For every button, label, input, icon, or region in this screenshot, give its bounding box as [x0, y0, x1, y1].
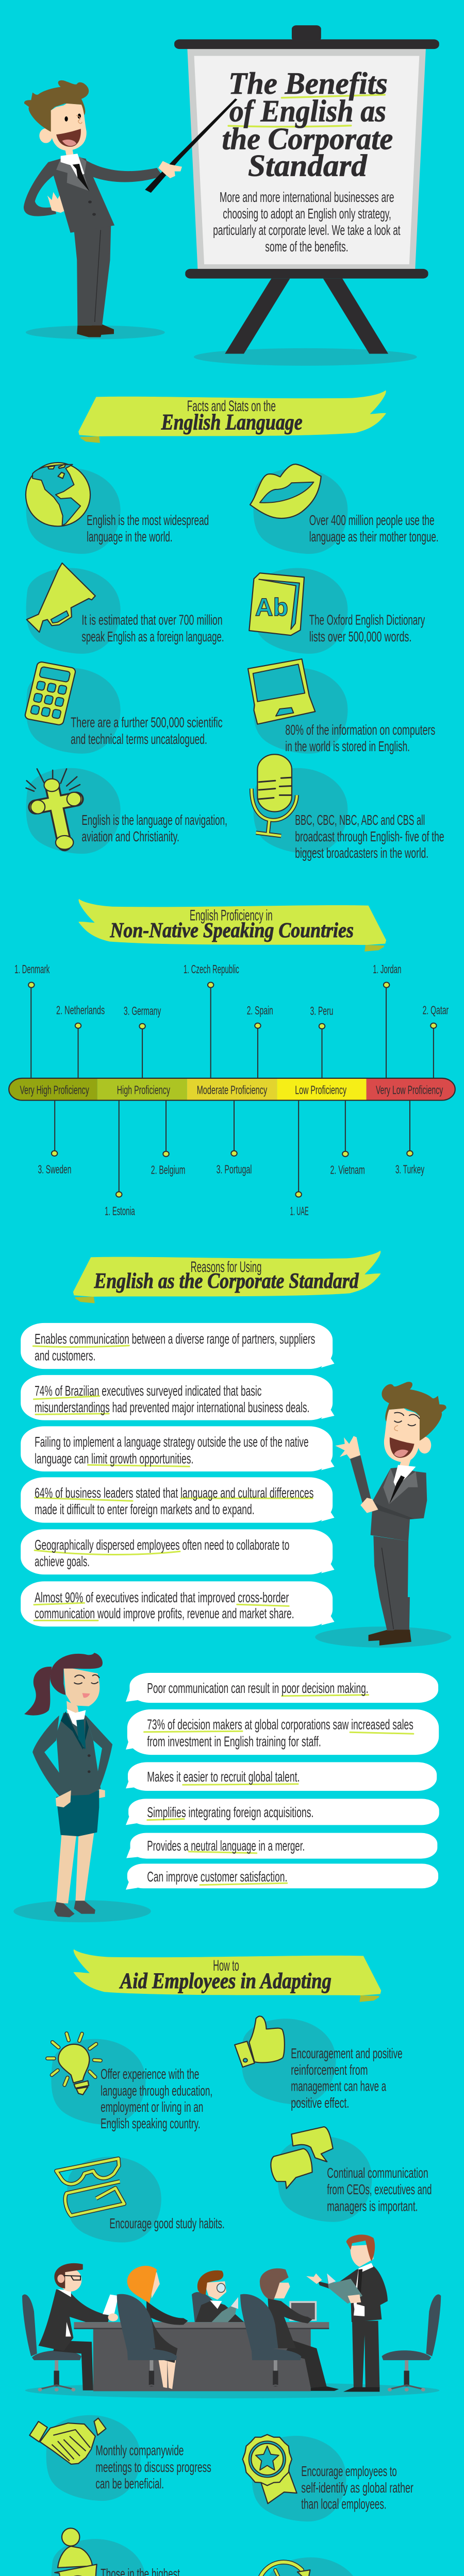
speech bubble 9: Makes it easier to recruit global talent. — [147, 1769, 300, 1785]
tip text 6 — [301, 2463, 413, 2512]
icon backdrops — [26, 468, 347, 854]
speech bubble 1: and customers. — [35, 1348, 95, 1364]
intro text: some of the benefits. — [265, 239, 349, 255]
icon: thumbs up — [235, 2016, 285, 2067]
speech bubble 2 — [21, 1375, 335, 1420]
speech bubble 11: Provides a neutral language in a merger. — [147, 1838, 305, 1854]
banner: aid employees — [73, 1950, 381, 2002]
banner: facts and stats — [78, 391, 386, 443]
tip text 3: Encourage good study habits. — [109, 2216, 225, 2232]
seated man right — [240, 2268, 339, 2391]
country labels: 1. Denmark — [14, 962, 50, 976]
speech bubble 12 — [126, 1863, 438, 1890]
meeting scene — [22, 2234, 441, 2398]
seated man left — [39, 2263, 119, 2391]
title — [222, 66, 393, 183]
fact text 8 — [295, 812, 444, 861]
fact text 3: It is estimated that over 700 million — [81, 612, 223, 628]
banner: facts and stats: Facts and Stats on the — [187, 397, 276, 415]
icon: lips — [250, 464, 321, 518]
country labels: 2. Vietnam — [330, 1163, 365, 1177]
country labels: 3. Germany — [124, 1004, 161, 1018]
right empty chair — [382, 2294, 441, 2392]
title highlights — [228, 95, 385, 127]
speech bubble 3 — [21, 1426, 335, 1471]
icon: glasses and book — [56, 2159, 124, 2216]
icon: speech bubbles — [271, 2127, 333, 2189]
tip text 5 — [95, 2442, 211, 2492]
icon: megaphone — [27, 563, 95, 632]
banner: proficiency: English Proficiency in — [190, 906, 273, 924]
proficiency bar: Moderate Proficiency — [197, 1083, 268, 1097]
fact text 3: speak English as a foreign language. — [81, 629, 224, 645]
fact text 1: language in the world. — [87, 529, 173, 545]
icon: laptop — [248, 659, 315, 724]
banner: proficiency: Non-Native Speaking Countries — [110, 919, 354, 942]
speech bubble 10: Simplifies integrating foreign acquisitions. — [147, 1805, 313, 1821]
country labels: 3. Peru — [310, 1004, 333, 1018]
title: The Benefits — [228, 66, 388, 101]
tip text 5: meetings to discuss progress — [95, 2459, 211, 2476]
proficiency timeline chart — [9, 962, 455, 1218]
banner: reasons: Reasons for Using — [191, 1258, 261, 1275]
intro text — [213, 189, 401, 255]
easel shadow — [194, 348, 417, 366]
tip text 1: employment or living in an — [101, 2099, 203, 2115]
tip text 1 — [101, 2066, 212, 2132]
banner: aid employees: How to — [213, 1957, 239, 1974]
section: aid employees tips continued — [29, 2415, 420, 2576]
speech bubble 6 — [21, 1581, 335, 1626]
fact text 1 — [87, 512, 209, 545]
tip text 2 — [291, 2045, 403, 2111]
country labels: 1. Czech Republic — [184, 962, 239, 976]
section: facts and stats — [24, 391, 439, 854]
proficiency bar: Low Proficiency — [295, 1083, 346, 1097]
proficiency bar: High Proficiency — [117, 1083, 170, 1097]
fact text 5 — [71, 715, 223, 747]
country labels: 3. Turkey — [395, 1163, 424, 1176]
fact text 4 — [309, 612, 425, 645]
title: Standard — [248, 149, 368, 183]
icon: award badge — [243, 2435, 297, 2503]
banner: proficiency — [78, 899, 386, 952]
icon: dictionary — [249, 573, 304, 635]
woman in blazer — [13, 1653, 151, 1922]
proficiency bar: Very High Proficiency — [20, 1083, 89, 1097]
speech bubble 9 — [126, 1762, 437, 1791]
connector lines — [31, 985, 434, 1194]
country labels: 3. Portugal — [217, 1163, 252, 1176]
icon: cross — [26, 769, 81, 849]
icon: microphone — [252, 754, 297, 836]
speech bubble 3: language can limit growth opportunities. — [35, 1451, 193, 1467]
tip text 5: Monthly companywide — [95, 2442, 184, 2459]
tip text 2: reinforcement from — [291, 2062, 368, 2078]
banner: facts and stats: English Language — [161, 410, 303, 435]
tip backdrops — [51, 2019, 372, 2243]
section: reasons continued — [13, 1653, 439, 2002]
fact text 7: aviation and Christianity. — [81, 829, 179, 845]
fact text 2 — [309, 512, 439, 545]
country labels: 3. Sweden — [38, 1163, 71, 1176]
speech bubble 10 — [126, 1799, 439, 1825]
tip text 6: than local employees. — [301, 2496, 387, 2512]
fact text 7: English is the language of navigation, — [81, 812, 227, 828]
country labels: 1. UAE — [290, 1205, 309, 1218]
fact text 7 — [81, 812, 227, 845]
tip text 1: English speaking country. — [101, 2116, 201, 2132]
banner: reasons: English as the Corporate Standard — [94, 1268, 359, 1293]
icon: podium speaker — [55, 2528, 97, 2576]
speech bubble 5 — [21, 1529, 335, 1574]
country labels — [14, 962, 449, 1218]
projection screen easel — [174, 25, 439, 354]
country labels: 2. Spain — [247, 1004, 273, 1018]
tip text 6: Encourage employees to — [301, 2463, 397, 2479]
seated woman — [117, 2266, 188, 2389]
speech bubble 4 — [21, 1477, 335, 1523]
tip text 5: can be beneficial. — [95, 2476, 164, 2492]
title: of English as — [229, 94, 386, 129]
fact text 5: There are a further 500,000 scientific — [71, 715, 223, 731]
tip text 2: positive effect. — [291, 2095, 349, 2111]
speech bubble 1 — [21, 1323, 335, 1369]
section: aid employees tips — [22, 2016, 441, 2398]
left chair — [22, 2294, 81, 2392]
country labels: 2. Belgium — [151, 1163, 185, 1177]
speech bubble 7 — [126, 1673, 438, 1703]
icon: handshake — [29, 2418, 106, 2464]
speech bubble 12: Can improve customer satisfaction. — [147, 1869, 287, 1885]
laughing man — [315, 1382, 451, 1648]
icon: globe — [26, 463, 90, 526]
country labels: 2. Netherlands — [56, 1004, 105, 1017]
speech bubble 8: from investment in English training for staff. — [147, 1734, 321, 1750]
icon: clock — [258, 2562, 310, 2576]
fact text 3 — [81, 612, 224, 645]
table — [74, 2322, 329, 2391]
tip text 1: language through education, — [101, 2083, 212, 2099]
country labels: 1. Jordan — [373, 962, 401, 976]
fact text 5: and technical terms uncatalogued. — [71, 731, 207, 747]
centre man — [192, 2270, 244, 2322]
speech bubble 4: made it difficult to enter foreign markets and to expand. — [35, 1501, 255, 1517]
hero: presenter and projection board — [24, 25, 439, 366]
icon: dictionary: Ab — [255, 594, 288, 621]
tip text 1: Offer experience with the — [101, 2066, 199, 2082]
speech bubble 5: achieve goals. — [35, 1553, 90, 1569]
proficiency bar — [9, 1078, 455, 1101]
fact text 1: English is the most widespread — [87, 512, 209, 528]
section: reasons for using english — [21, 1251, 451, 1648]
tip backdrops — [46, 2415, 361, 2576]
icon: light bulb — [47, 2033, 101, 2095]
standing man — [306, 2234, 388, 2392]
section: facts continued and proficiency chart — [9, 754, 455, 1218]
tip text 4 — [327, 2165, 432, 2214]
speech bubble 8 — [126, 1709, 439, 1755]
speech bubble 2: 74% of Brazilian executives surveyed indicated that basic — [35, 1383, 261, 1399]
icon: calculator — [24, 662, 76, 725]
speech bubble 11 — [126, 1833, 437, 1859]
title: the Corporate — [222, 122, 393, 156]
country labels: 1. Estonia — [105, 1205, 135, 1218]
banner: aid employees: Aid Employees in Adapting — [119, 1969, 332, 1993]
presenter man — [24, 80, 237, 339]
banner: reasons — [73, 1251, 381, 1303]
tip text 6: self-identify as global rather — [301, 2480, 413, 2496]
pin markers — [28, 982, 437, 1197]
fact text 6 — [285, 722, 435, 755]
